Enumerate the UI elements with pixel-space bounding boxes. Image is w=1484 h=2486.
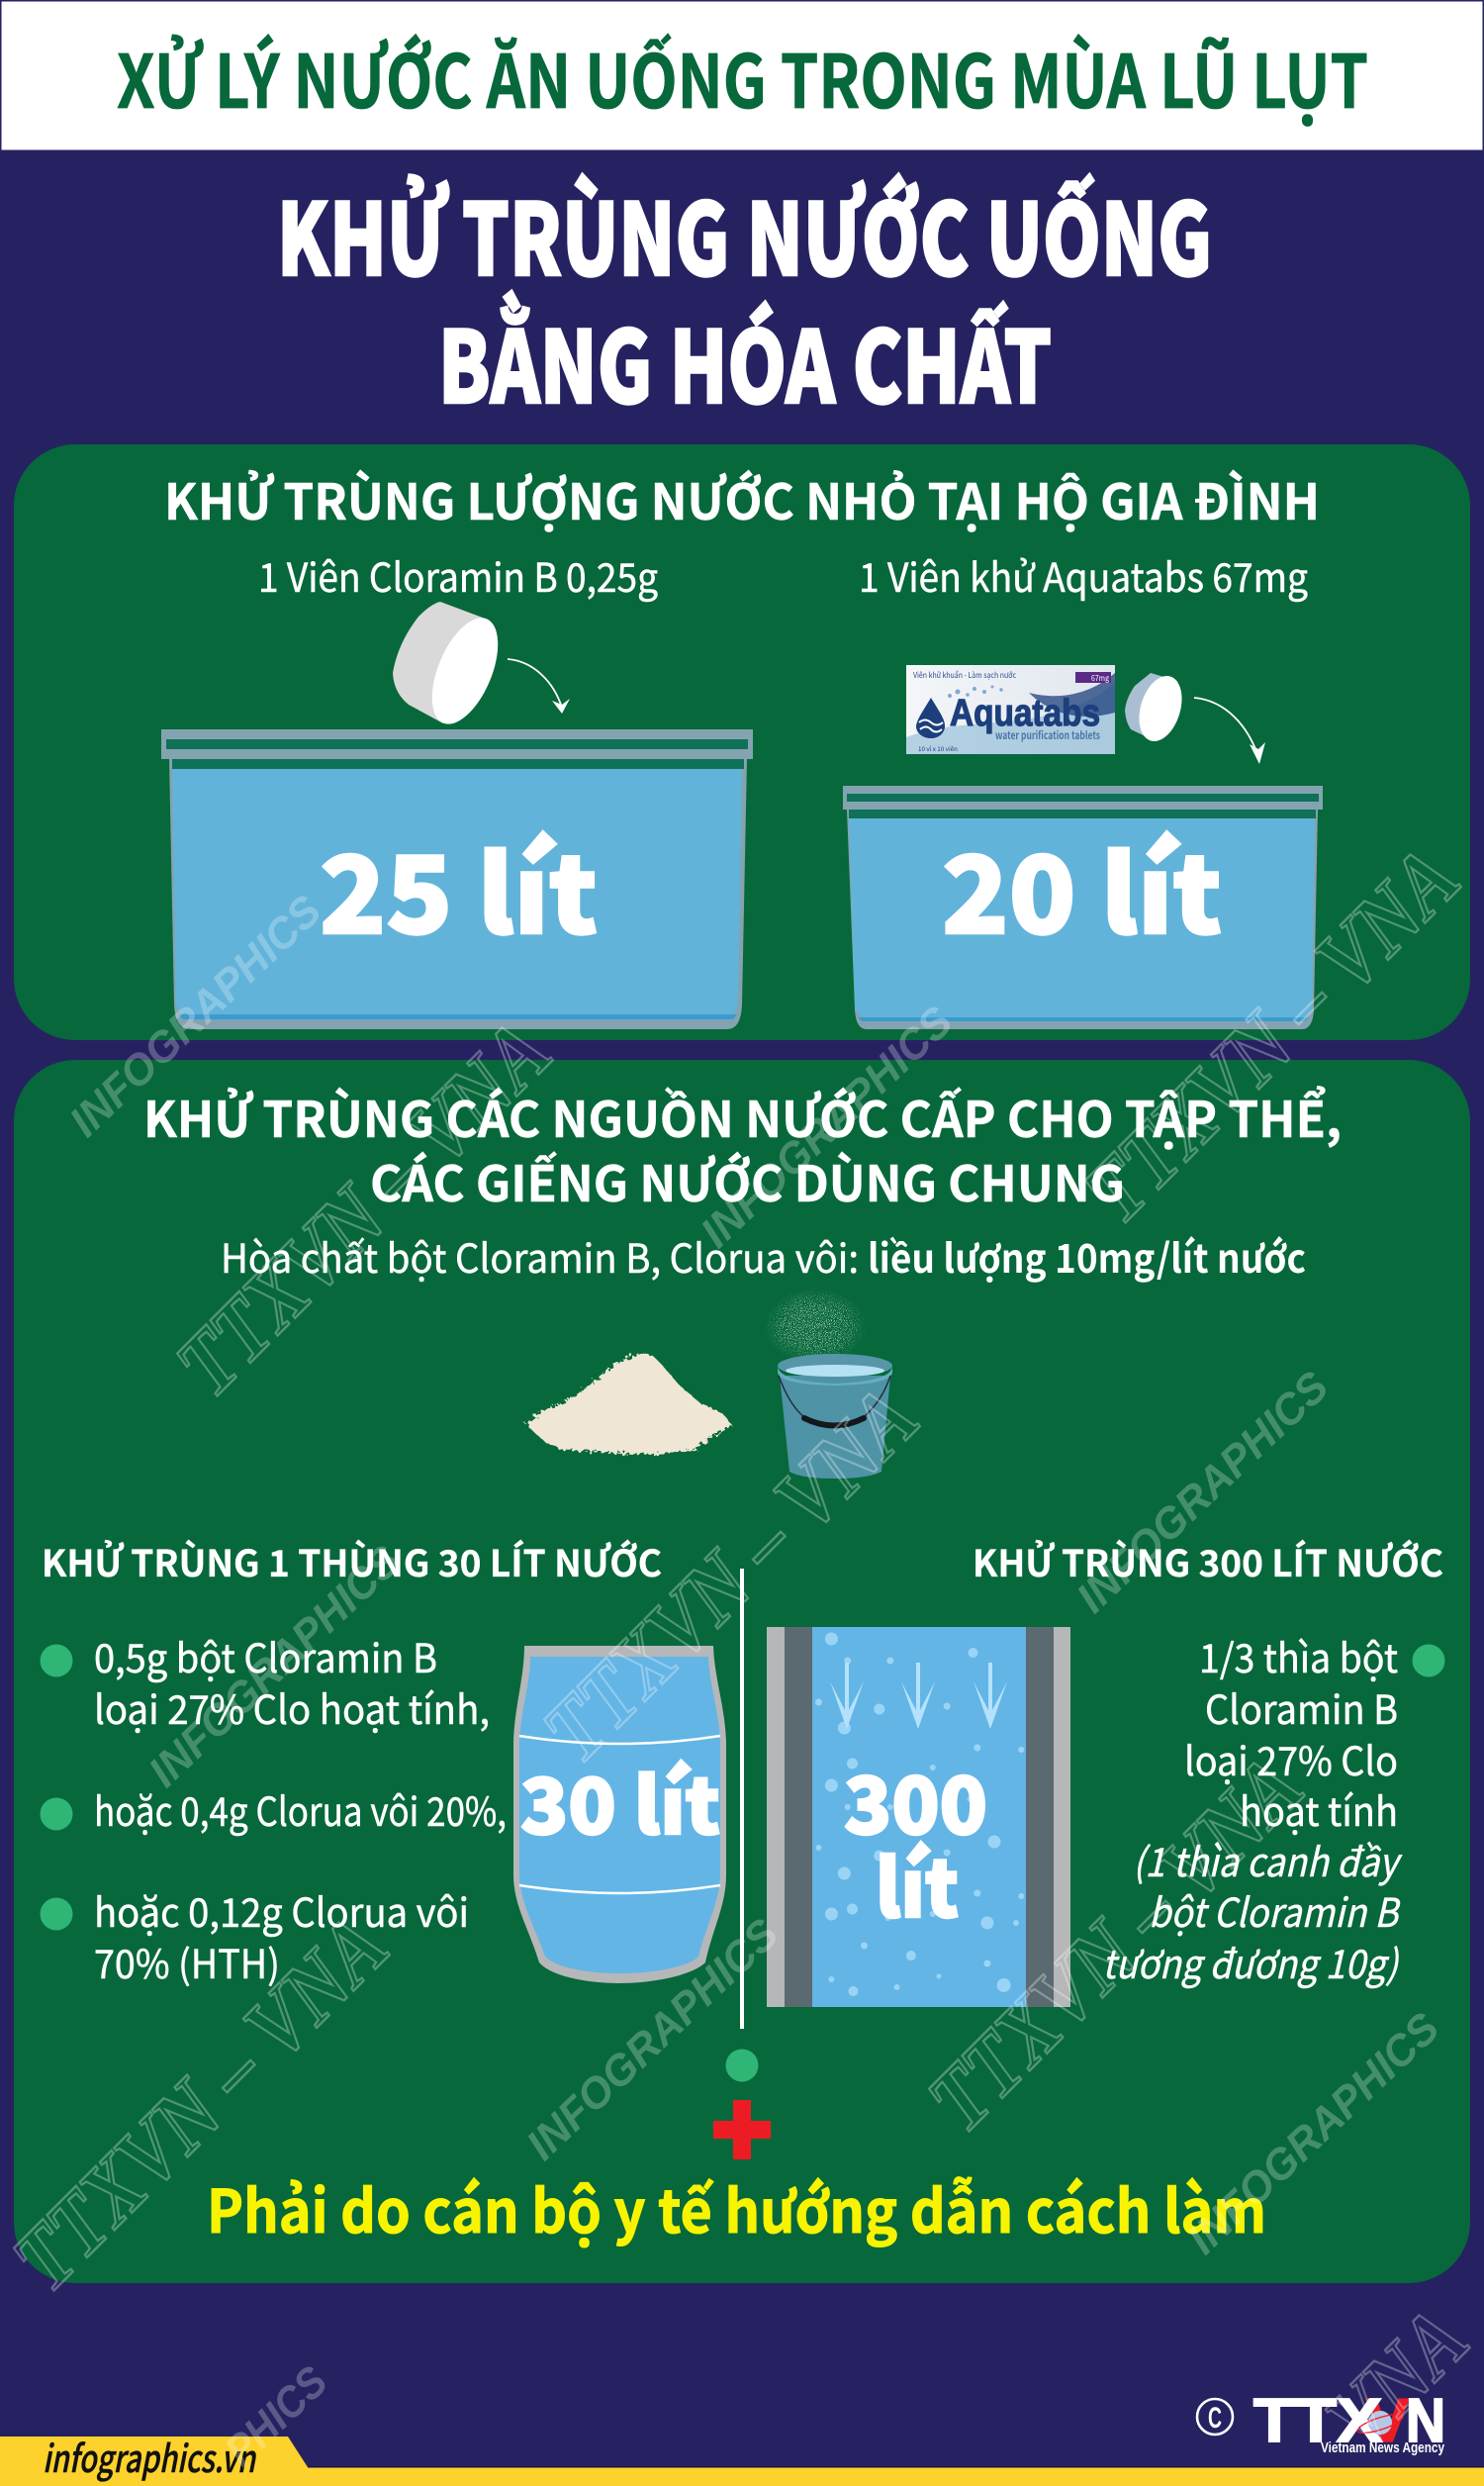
note: tablespoon equivalent: bột Cloramin B — [1149, 1881, 1401, 1939]
label: chloramine tablet: 1 Viên Cloramin B 0,25g — [258, 546, 658, 604]
volume: 30 litres: 30 lít — [520, 1746, 720, 1857]
panel heading: KHỬ TRÙNG LƯỢNG NƯỚC NHỎ TẠI HỘ GIA ĐÌNH — [164, 463, 1320, 534]
bullet: chlorinated lime 70% — [40, 1881, 469, 1990]
main heading — [277, 160, 1212, 431]
dosage line: liều lượng 10mg/lít nước — [868, 1227, 1306, 1285]
callout: medical guidance: Phải do cán bộ y tế hướng dẫn cách làm — [207, 2164, 1266, 2250]
section heading: KHỬ TRÙNG 1 THÙNG 30 LÍT NƯỚC — [42, 1534, 662, 1587]
note: tablespoon equivalent: tương đương 10g) — [1102, 1933, 1399, 1990]
bullet: chloramine B: loại 27% Clo hoạt tính, — [94, 1678, 490, 1736]
header band — [1, 1, 1483, 150]
panel: household disinfection — [14, 444, 1470, 1040]
product box: Aquatabs: 10 vỉ x 10 viên — [918, 744, 958, 753]
volume: 300 litres: lít — [876, 1826, 959, 1941]
website: infographics.vn — [43, 2429, 257, 2483]
dot — [726, 2049, 758, 2082]
note: tablespoon equivalent — [1102, 1831, 1403, 1990]
bullet: chlorinated lime 20%: hoặc 0,4g Clorua vôi 20%, — [94, 1780, 507, 1838]
product box: Aquatabs: water purification tablets — [995, 727, 1100, 743]
logo: TTXVN: TTX — [1253, 2387, 1382, 2455]
icon: red cross — [713, 2100, 771, 2159]
product box: Aquatabs — [906, 665, 1115, 754]
bullet: chloramine B: 0,5g bột Cloramin B — [94, 1627, 437, 1684]
logo: TTXVN: C — [1208, 2402, 1222, 2435]
panel heading — [143, 1081, 1342, 1216]
dosage line: Hòa chất bột Cloramin B, Clorua vôi: — [221, 1227, 859, 1285]
panel heading: KHỬ TRÙNG CÁC NGUỒN NƯỚC CẤP CHO TẬP THỂ, — [143, 1081, 1342, 1152]
panel heading: CÁC GIẾNG NƯỚC DÙNG CHUNG — [370, 1145, 1125, 1216]
icon: 300 litre tank — [767, 1627, 1070, 2007]
arrows: water flow — [830, 1663, 1007, 1729]
icon: powder pile — [526, 1354, 732, 1455]
section heading: KHỬ TRÙNG 300 LÍT NƯỚC — [973, 1534, 1443, 1587]
watermarks: INFOGRAPHICS — [517, 1910, 788, 2169]
icon: chloramine tablet — [393, 602, 511, 733]
product box: Aquatabs: Viên khử khuẩn - Làm sạch nước — [913, 670, 1016, 681]
bullet: 300 litre dosage: hoạt tính — [1240, 1780, 1398, 1838]
icon: bucket — [778, 1354, 892, 1479]
tank: 25 litres — [161, 729, 753, 1029]
watermarks: INFOGRAPHICS — [1178, 2004, 1448, 2263]
watermarks: INFOGRAPHICS — [139, 1537, 410, 1796]
section: 30 litre barrel — [40, 1534, 726, 1990]
watermarks: INFOGRAPHICS — [60, 887, 330, 1146]
product box: Aquatabs: 67mg — [1091, 673, 1109, 684]
watermarks: TTXVN – VNA — [909, 1738, 1322, 2150]
volume: 20 litres: 20 lít — [942, 811, 1222, 965]
label: aquatabs tablet: 1 Viên khử Aquatabs 67mg — [859, 546, 1308, 604]
divider — [740, 1569, 744, 2029]
icon: aquatabs tablet — [1125, 671, 1189, 746]
logo: TTXVN: Vietnam News Agency — [1321, 2440, 1444, 2456]
note: tablespoon equivalent: (1 thìa canh đầy — [1133, 1831, 1403, 1888]
icon: spray over bucket — [764, 1289, 867, 1364]
arrow: tablet into tank — [508, 659, 570, 714]
watermarks: TTXVN – VNA — [0, 1897, 407, 2309]
bullet: chlorinated lime 70%: 70% (HTH) — [94, 1933, 280, 1990]
bullet: chlorinated lime 70%: hoặc 0,12g Clorua vôi — [94, 1881, 469, 1939]
volume: 25 litres: 25 lít — [320, 811, 598, 965]
volume: 300 litres — [844, 1743, 987, 1941]
watermarks: TTXVN – VNA — [157, 1003, 570, 1414]
watermarks: INFOGRAPHICS — [1067, 1363, 1338, 1622]
icon: 30 litre barrel — [513, 1646, 726, 1983]
product box: Aquatabs: Aquatabs — [950, 693, 1100, 734]
dosage line — [221, 1227, 1306, 1285]
bullet: 300 litre dosage: loại 27% Clo — [1184, 1730, 1398, 1787]
main heading: BẰNG HÓA CHẤT — [438, 288, 1052, 431]
logo: TTXVN: V — [1366, 2387, 1409, 2455]
section: 300 litre tank — [767, 1534, 1444, 2007]
watermarks: PHICS — [216, 2357, 336, 2475]
arrow: aquatabs into tank — [1194, 698, 1265, 764]
volume: 300 litres: 300 — [844, 1743, 987, 1858]
logo: TTXVN: N — [1406, 2387, 1445, 2455]
watermarks: INFOGRAPHICS — [692, 998, 962, 1257]
watermarks — [0, 829, 1484, 2475]
watermarks: TTXVN – VNA — [524, 1369, 937, 1780]
logo: TTXVN — [1197, 2387, 1445, 2456]
bullet: chloramine B — [40, 1627, 490, 1736]
tank: 20 litres — [843, 786, 1323, 1029]
footer band — [0, 2429, 1484, 2486]
panel: collective water sources — [14, 1060, 1470, 2283]
bullet: 300 litre dosage — [1184, 1627, 1444, 1838]
bullet: 300 litre dosage: 1/3 thìa bột — [1199, 1627, 1398, 1684]
bullet: 300 litre dosage: Cloramin B — [1205, 1678, 1398, 1736]
